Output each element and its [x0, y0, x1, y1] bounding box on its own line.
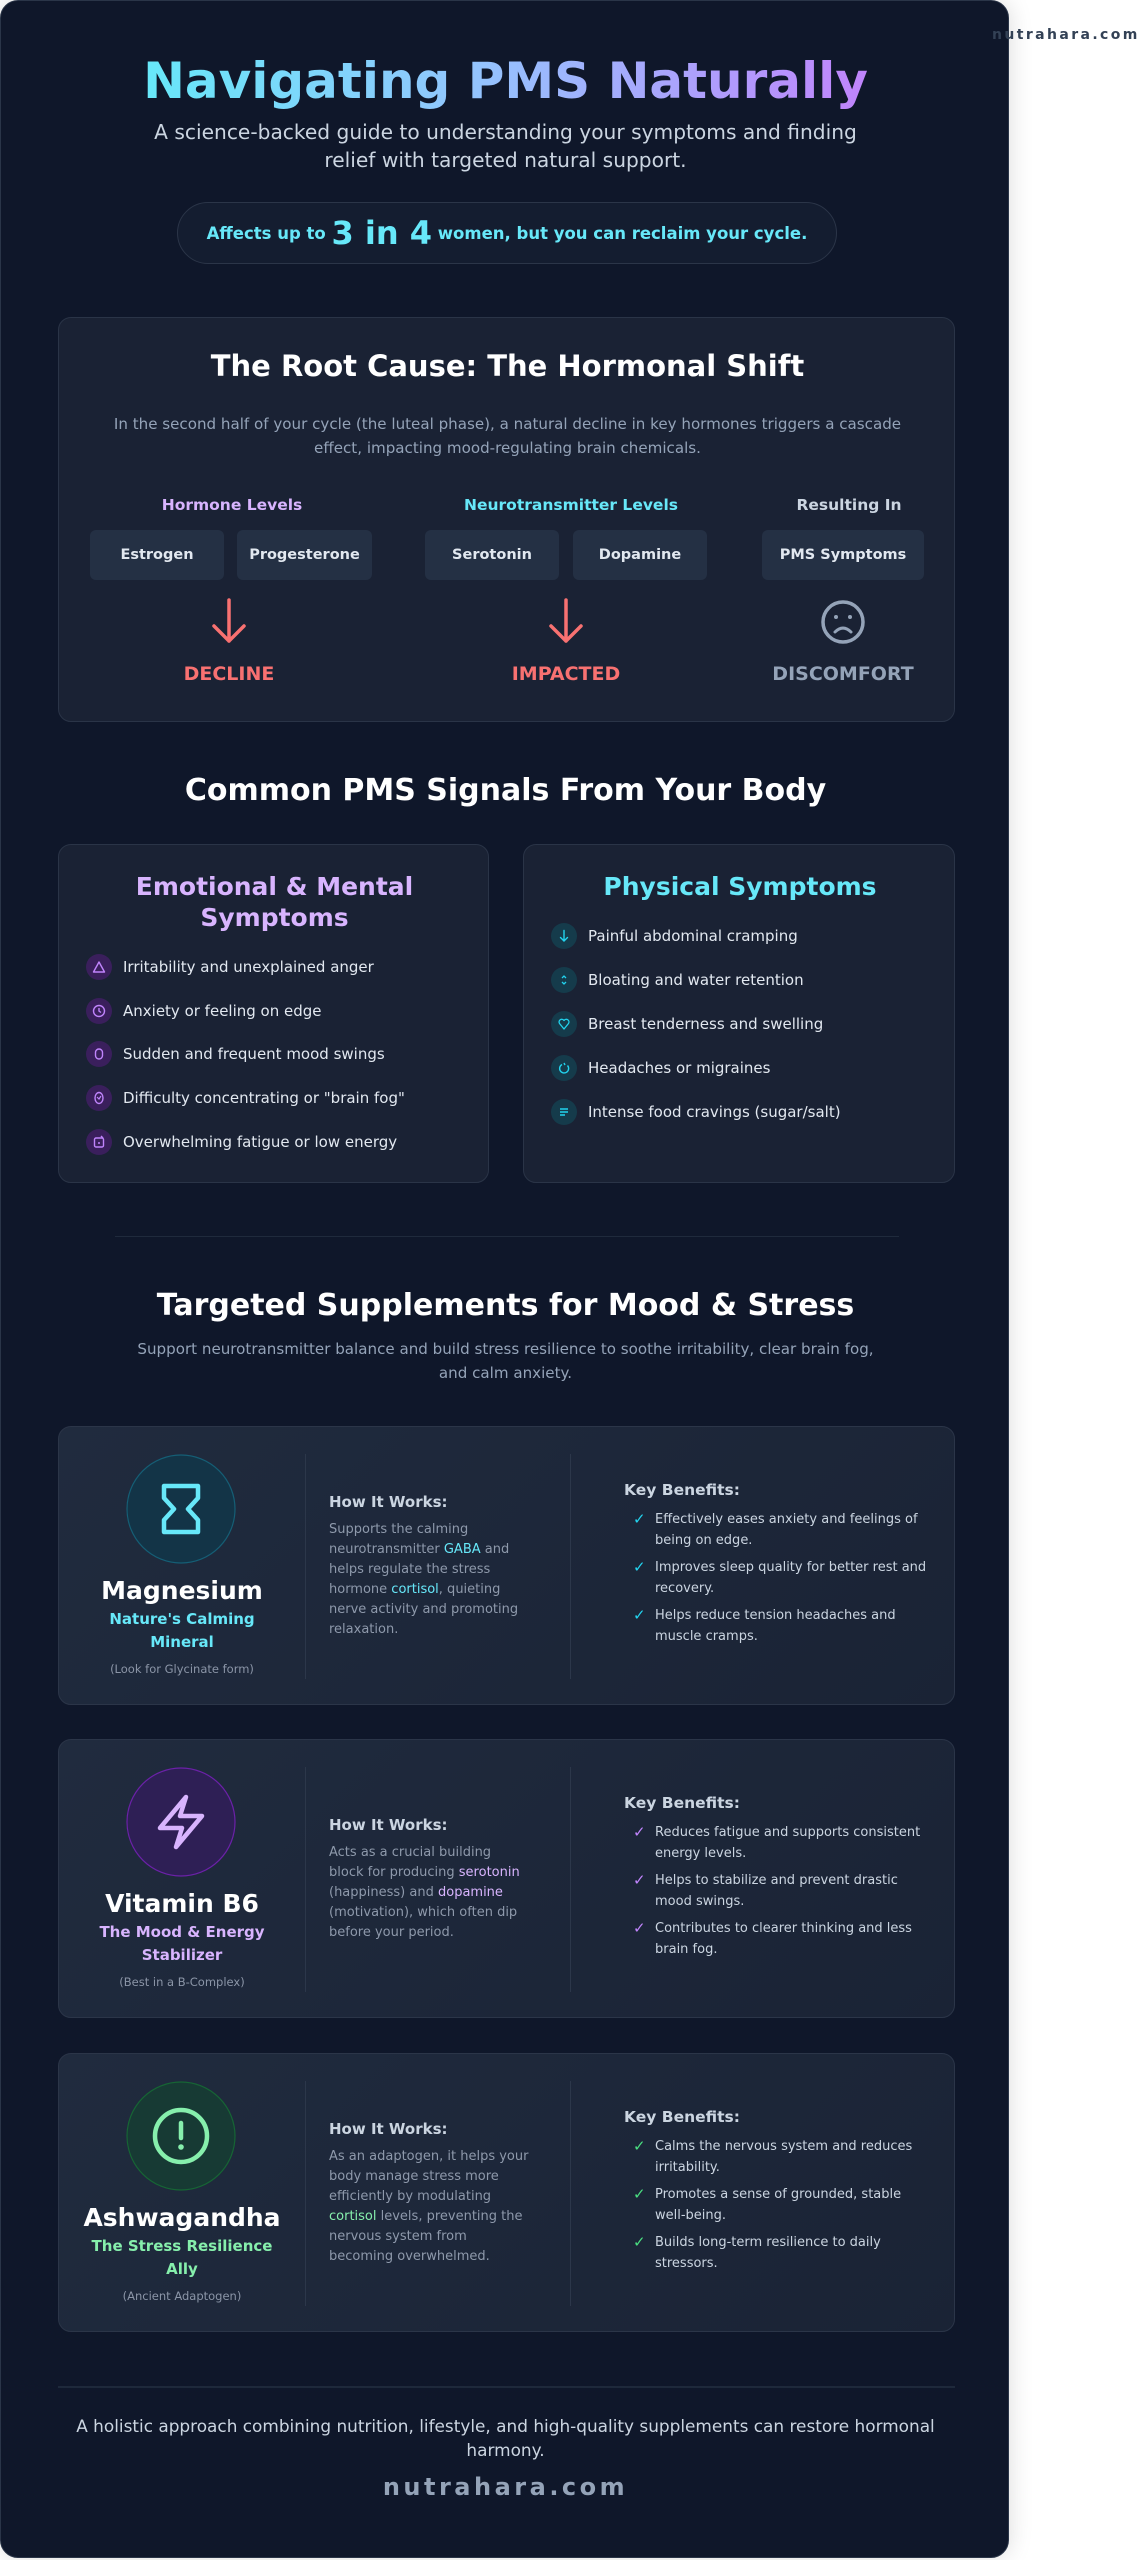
label impacted: IMPACTED [512, 663, 620, 685]
item bloating [551, 967, 804, 993]
item bloating: Bloating and water retention [588, 971, 804, 989]
root cause description: effect, impacting mood-regulating brain chemicals. [314, 439, 701, 457]
icon alert [126, 2081, 236, 2191]
brand tag top right: nutrahara.com [992, 27, 1140, 43]
icon lightning [126, 1767, 236, 1877]
supplements intro: and calm anxiety. [439, 1364, 572, 1382]
supplements intro [137, 1340, 874, 1382]
item cramping [551, 923, 798, 949]
key benefits magnesium [624, 1480, 926, 1644]
item mood swings: Sudden and frequent mood swings [123, 1045, 385, 1063]
arrow impacted [549, 598, 583, 643]
column header: neurotransmitters: Neurotransmitter Levels [464, 496, 678, 514]
key benefits magnesium: ✓ [633, 1558, 646, 1576]
item breast tenderness: Breast tenderness and swelling [588, 1015, 823, 1033]
box dopamine: Dopamine [599, 547, 681, 563]
item headaches [551, 1055, 770, 1081]
subtitle: relief with targeted natural support. [324, 148, 687, 172]
emotional title: Emotional & Mental Symptoms [136, 872, 413, 932]
supplement card: magnesium [58, 1426, 955, 1705]
icon sad face [821, 600, 865, 644]
arrow decline [212, 598, 246, 643]
title: Navigating PMS Naturally [143, 52, 868, 110]
supplement card: ashwagandha [58, 2053, 955, 2332]
item irritability: Irritability and unexplained anger [123, 958, 374, 976]
how it works magnesium: Supports the calming neurotransmitter GABA and helps regulate the stress hormone cortisol, quieting nerve activity and promoting relaxation. [329, 1522, 518, 1637]
physical items [551, 923, 841, 1125]
how it works ashwagandha: How It Works: [329, 2120, 448, 2138]
key benefits b6: Helps to stabilize and prevent drastic mood swings. [655, 1872, 898, 1908]
item cramping: Painful abdominal cramping [588, 927, 798, 945]
footer text: A holistic approach combining nutrition, lifestyle, and high-quality supplements can restore hormonal [76, 2416, 935, 2436]
heading targeted supplements: Targeted Supplements for Mood & Stress [157, 1288, 854, 1323]
key benefits b6: ✓ [633, 1822, 646, 1840]
supplement card: vitamin b6 [58, 1739, 955, 2018]
key benefits magnesium: ✓ [633, 1606, 646, 1624]
item mood swings [86, 1041, 385, 1067]
stat pill [177, 202, 837, 264]
box pms symptoms [762, 530, 924, 580]
name magnesium: Magnesium [101, 1576, 263, 1605]
key benefits ashwagandha: Builds long-term resilience to daily stressors. [655, 2234, 881, 2270]
box pms symptoms: PMS Symptoms [780, 547, 906, 563]
note b6: (Best in a B-Complex) [119, 1975, 245, 1989]
key benefits ashwagandha: ✓ [633, 2136, 646, 2154]
box serotonin: Serotonin [452, 547, 532, 563]
emotional items [86, 954, 405, 1155]
footer text: harmony. [466, 2440, 545, 2460]
how it works b6: Acts as a crucial building block for producing serotonin (happiness) and dopamine (motivation), which often dip before your period. [329, 1845, 520, 1940]
stat pill: 3 in 4 [331, 214, 432, 252]
item brain fog [86, 1085, 405, 1111]
note magnesium: (Look for Glycinate form) [110, 1662, 254, 1676]
tagline magnesium: Nature's Calming Mineral [109, 1610, 255, 1651]
key benefits ashwagandha: Promotes a sense of grounded, stable well-being. [655, 2186, 901, 2222]
physical title: Physical Symptoms [603, 872, 877, 901]
note ashwagandha: (Ancient Adaptogen) [123, 2289, 241, 2303]
key benefits b6 [624, 1794, 920, 1956]
key benefits b6: Key Benefits: [624, 1794, 740, 1812]
tagline b6: The Mood & Energy Stabilizer [99, 1923, 265, 1964]
key benefits ashwagandha: ✓ [633, 2184, 646, 2202]
key benefits b6: ✓ [633, 1870, 646, 1888]
icon hourglass [126, 1454, 236, 1564]
box dopamine [573, 530, 707, 580]
name ashwagandha: Ashwagandha [83, 2203, 281, 2232]
heading common signals: Common PMS Signals From Your Body [185, 773, 826, 808]
key benefits b6: ✓ [633, 1918, 646, 1936]
footer text [76, 2416, 935, 2460]
how it works magnesium: How It Works: [329, 1493, 448, 1511]
item breast tenderness [551, 1011, 823, 1037]
how it works b6: How It Works: [329, 1816, 448, 1834]
label discomfort: DISCOMFORT [772, 663, 914, 685]
label decline: DECLINE [184, 663, 274, 685]
item cravings: Intense food cravings (sugar/salt) [588, 1103, 841, 1121]
column header: hormones: Hormone Levels [162, 496, 302, 514]
item irritability [86, 954, 374, 980]
heading root cause: The Root Cause: The Hormonal Shift [211, 349, 804, 383]
item fatigue [86, 1129, 397, 1155]
column header: result: Resulting In [796, 496, 902, 514]
panel: root cause [58, 317, 955, 722]
item brain fog: Difficulty concentrating or "brain fog" [123, 1089, 405, 1107]
key benefits magnesium: ✓ [633, 1510, 646, 1528]
key benefits magnesium: Improves sleep quality for better rest and recovery. [655, 1560, 926, 1596]
item fatigue: Overwhelming fatigue or low energy [123, 1133, 397, 1151]
key benefits ashwagandha [624, 2108, 912, 2270]
key benefits ashwagandha: Calms the nervous system and reduces irritability. [655, 2138, 912, 2174]
root cause description [114, 415, 901, 457]
name vitamin b6: Vitamin B6 [105, 1889, 259, 1918]
key benefits magnesium: Effectively eases anxiety and feelings of being on edge. [655, 1512, 918, 1548]
footer brand: nutrahara.com [383, 2473, 628, 2501]
item headaches: Headaches or migraines [588, 1059, 770, 1077]
panel: physical symptoms [523, 844, 955, 1183]
box estrogen [90, 530, 224, 580]
subtitle [154, 120, 857, 172]
key benefits b6: Contributes to clearer thinking and less brain fog. [655, 1920, 912, 1956]
key benefits ashwagandha: Key Benefits: [624, 2108, 740, 2126]
supplements intro: Support neurotransmitter balance and build stress resilience to soothe irritability, clear brain fog, [137, 1340, 874, 1358]
item anxiety: Anxiety or feeling on edge [123, 1002, 322, 1020]
item cravings [551, 1099, 841, 1125]
box progesterone: Progesterone [249, 547, 360, 563]
key benefits b6: Reduces fatigue and supports consistent energy levels. [655, 1824, 920, 1860]
key benefits magnesium: Helps reduce tension headaches and muscle cramps. [655, 1608, 896, 1644]
item anxiety [86, 998, 322, 1024]
box estrogen: Estrogen [120, 547, 194, 563]
tagline ashwagandha: The Stress Resilience Ally [92, 2237, 272, 2278]
root cause description: In the second half of your cycle (the luteal phase), a natural decline in key hormones triggers a cascade [114, 415, 901, 433]
stat pill: Affects up to women, but you can reclaim your cycle. [207, 224, 807, 242]
how it works ashwagandha: As an adaptogen, it helps your body manage stress more efficiently by modulating cortisol levels, preventing the nervous system from becoming overwhelmed. [329, 2149, 528, 2264]
key benefits ashwagandha: ✓ [633, 2232, 646, 2250]
subtitle: A science-backed guide to understanding your symptoms and finding [154, 120, 857, 144]
box progesterone [237, 530, 372, 580]
panel: emotional symptoms [58, 844, 489, 1183]
key benefits magnesium: Key Benefits: [624, 1480, 740, 1498]
box serotonin [425, 530, 559, 580]
